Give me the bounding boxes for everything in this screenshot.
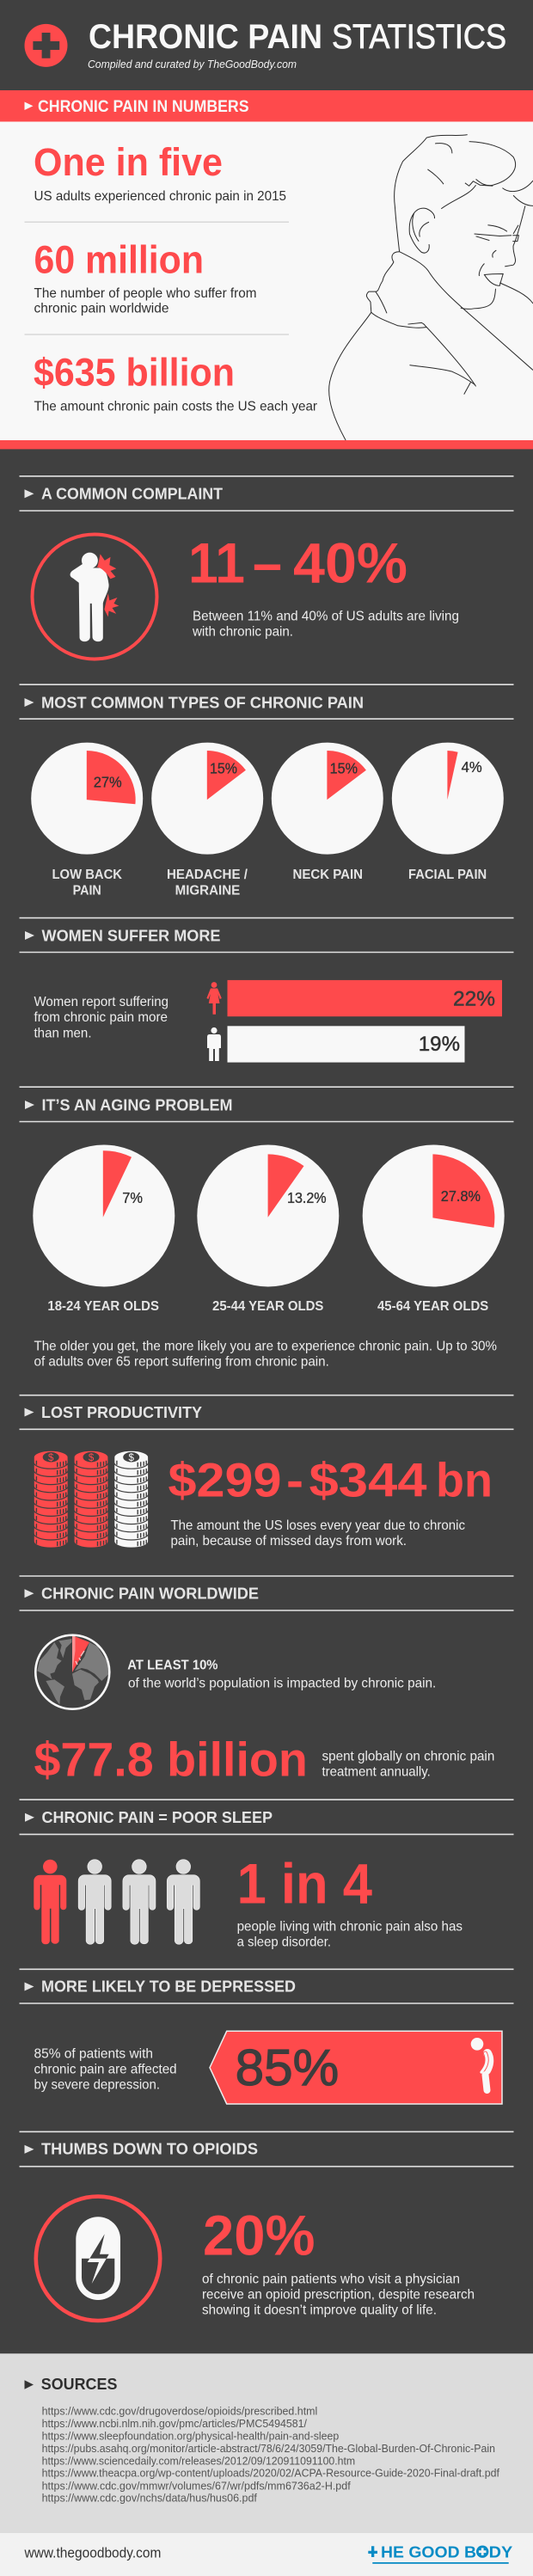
heading: [19, 2131, 514, 2167]
panel: sources: [0, 2353, 533, 2533]
heading: MOST COMMON TYPES OF CHRONIC PAIN: [41, 694, 364, 711]
pie: headache / migraine: MIGRAINE: [175, 883, 241, 898]
source list: https://www.ncbi.nlm.nih.gov/pmc/articles/PMC5494581/: [42, 2417, 307, 2430]
red stack one: $: [48, 1453, 54, 1463]
heading: LOST PRODUCTIVITY: [41, 1404, 202, 1421]
title: STATISTICS: [332, 18, 506, 56]
pie: low back pain: LOW BACK: [52, 868, 122, 882]
heading: [19, 684, 514, 719]
stat: one in five: US adults experienced chronic pain in 2015: [34, 189, 286, 204]
big stat: 1 in 4: [237, 1851, 372, 1915]
body text: [34, 1339, 497, 1370]
footer: [0, 2533, 533, 2576]
heading: [19, 1395, 514, 1429]
source list: https://www.sciencedaily.com/releases/2012/09/120911091100.htm: [42, 2454, 355, 2467]
logo: the good body: HE GOOD B: [381, 2542, 476, 2561]
source list: https://www.cdc.gov/mmwr/volumes/67/wr/pdfs/mm6736a2-H.pdf: [42, 2479, 351, 2492]
pie: 25-44: 25-44 YEAR OLDS: [212, 1299, 324, 1314]
panel: most common types of chronic pain: [19, 684, 514, 898]
icon: medical cross: [24, 24, 67, 67]
panel: poor sleep: [19, 1800, 514, 1949]
heading: WOMEN SUFFER MORE: [41, 927, 220, 944]
body text: [34, 995, 168, 1040]
panel: a common complaint: [19, 476, 514, 659]
panel: more likely to be depressed: [19, 1969, 514, 2104]
stat: one in five: One in five: [34, 140, 223, 184]
source list: https://www.cdc.gov/drugoverdose/opioids/prescribed.html: [42, 2405, 317, 2418]
icon: pill in circle: [36, 2197, 160, 2321]
heading: [19, 1087, 514, 1121]
stat: 60 million: 60 million: [34, 237, 204, 282]
pie: 18-24: 7%: [122, 1189, 143, 1206]
icon: man: [207, 1027, 221, 1061]
body text: showing it doesn’t improve quality of life.: [202, 2303, 437, 2318]
source list: [42, 2405, 499, 2505]
heading: IT’S AN AGING PROBLEM: [41, 1096, 232, 1113]
pie: headache / migraine: [151, 743, 263, 898]
big stat: $299: [168, 1453, 282, 1506]
pie: facial pain: 4%: [462, 758, 482, 776]
heading: THUMBS DOWN TO OPIOIDS: [41, 2141, 258, 2158]
icon: four people: [34, 1860, 199, 1944]
panel: chronic pain worldwide: [19, 1576, 514, 1787]
icon: slumped figure: [471, 2038, 489, 2090]
stat: 60 million: chronic pain worldwide: [34, 301, 169, 316]
stat: 60 million: [34, 237, 256, 316]
body text: [170, 1518, 465, 1549]
panel: lost productivity: [19, 1395, 514, 1549]
bar: men 19%: [227, 1026, 464, 1063]
body text: The older you get, the more likely you are to experience chronic pain. Up to 30%: [34, 1339, 497, 1353]
bar: women 22%: 22%: [453, 987, 495, 1011]
stat: 635 billion: $635 billion: [34, 351, 235, 395]
pie: low back pain: PAIN: [73, 883, 101, 898]
body text: of adults over 65 report suffering from chronic pain.: [34, 1355, 329, 1370]
panel: aging problem: [19, 1087, 514, 1370]
big stat: $77.8 billion: [34, 1733, 308, 1787]
big stat: [168, 1453, 493, 1506]
big stat: 11: [188, 531, 245, 595]
pie: 25-44: [197, 1145, 339, 1314]
panel: women suffer more: [19, 918, 514, 1063]
text: at least 10%: of the world’s population is impacted by chronic pain.: [128, 1676, 436, 1690]
logo: the good body: DY: [489, 2542, 513, 2561]
body text: spent globally on chronic pain: [322, 1750, 494, 1764]
text: at least 10%: AT LEAST 10%: [127, 1659, 218, 1673]
pie: 45-64: 27.8%: [441, 1187, 481, 1205]
stat: 60 million: The number of people who suffer from: [34, 286, 256, 301]
source list: https://www.theacpa.org/wp-content/uploads/2020/02/ACPA-Resource-Guide-2020-Final-draft.pdf: [42, 2467, 499, 2480]
big stat: $344: [309, 1453, 426, 1506]
body text: people living with chronic pain also has: [237, 1919, 463, 1934]
big stat: 20%: [203, 2204, 315, 2267]
red stack two: $: [89, 1453, 95, 1463]
pie: facial pain: [392, 743, 504, 882]
body text: pain, because of missed days from work.: [170, 1534, 407, 1549]
body text: chronic pain are affected: [34, 2062, 177, 2076]
title: CHRONIC PAIN: [89, 18, 322, 56]
heading: [19, 1576, 514, 1610]
source list: https://www.sleepfoundation.org/physical-health/pain-and-sleep: [42, 2430, 339, 2443]
pie: 18-24: 18-24 YEAR OLDS: [47, 1299, 159, 1314]
logo: the good body: [368, 2542, 513, 2564]
icon: globe: [35, 1635, 109, 1709]
bar: women 22%: [227, 980, 502, 1016]
panel: chronic pain in numbers: [0, 90, 533, 449]
pie: headache / migraine: HEADACHE /: [167, 868, 248, 882]
pie: 25-44: 13.2%: [287, 1189, 327, 1206]
heading: CHRONIC PAIN WORLDWIDE: [41, 1585, 259, 1603]
body text: The amount the US loses every year due to chronic: [170, 1518, 465, 1533]
pie: neck pain: 15%: [330, 760, 358, 777]
body text: [237, 1919, 463, 1949]
stat: 635 billion: [34, 351, 318, 414]
big stat: 40%: [293, 531, 407, 595]
body text: than men.: [34, 1026, 91, 1040]
body text: 85% of patients with: [34, 2046, 153, 2061]
body text: Between 11% and 40% of US adults are living: [193, 609, 459, 624]
text: at least 10%: [127, 1659, 436, 1690]
heading: A COMMON COMPLAINT: [41, 486, 223, 503]
body text: [34, 2046, 177, 2092]
pie: neck pain: NECK PAIN: [292, 868, 363, 882]
header: [24, 18, 506, 71]
bar: men 19%: 19%: [419, 1033, 460, 1056]
panel: thumbs down to opioids: [19, 2131, 514, 2321]
body text: a sleep disorder.: [237, 1935, 331, 1949]
icon: person with pain points: [33, 535, 156, 659]
body text: [322, 1750, 494, 1780]
heading: CHRONIC PAIN = POOR SLEEP: [41, 1809, 273, 1826]
pie: neck pain: [272, 743, 383, 882]
title: [89, 18, 506, 56]
heading: SOURCES: [41, 2376, 117, 2393]
stat: 635 billion: The amount chronic pain costs the US each year: [34, 400, 318, 414]
banner: 85%: [210, 2031, 502, 2104]
white stack: $: [128, 1453, 134, 1463]
body text: [202, 2272, 475, 2318]
body text: receive an opioid prescription, despite research: [202, 2288, 475, 2303]
heading: [19, 1800, 514, 1834]
body text: treatment annually.: [322, 1765, 431, 1780]
body text: [192, 609, 459, 640]
big stat: –: [253, 531, 282, 595]
body text: from chronic pain more: [34, 1010, 168, 1025]
heading band: CHRONIC PAIN IN NUMBERS: [38, 97, 249, 116]
icon: coin stacks: [34, 1451, 149, 1548]
pie: facial pain: FACIAL PAIN: [408, 868, 487, 882]
heading: [19, 1969, 514, 2003]
body text: with chronic pain.: [192, 625, 293, 640]
pie: 45-64: [363, 1145, 505, 1314]
pie: 45-64: 45-64 YEAR OLDS: [377, 1299, 489, 1314]
stat: one in five: [34, 140, 286, 204]
source list: https://pubs.asahq.org/monitor/article-abstract/78/6/24/3059/The-Global-Burden-Of-Chronic-Pain: [42, 2442, 495, 2455]
banner: 85%: 85%: [236, 2039, 339, 2096]
icon: woman: [206, 982, 222, 1015]
pie: low back pain: 27%: [94, 773, 122, 790]
website url: www.thegoodbody.com: [24, 2545, 161, 2561]
pie: 18-24: [33, 1145, 175, 1314]
body text: of chronic pain patients who visit a physician: [202, 2272, 460, 2287]
body text: by severe depression.: [34, 2077, 160, 2092]
heading band: [0, 90, 533, 122]
pie: headache / migraine: 15%: [210, 760, 237, 777]
pie: low back pain: [31, 743, 143, 898]
source list: https://www.cdc.gov/nchs/data/hus/hus06.pdf: [42, 2492, 257, 2505]
illustration: man holding neck: [329, 135, 533, 440]
body text: Women report suffering: [34, 995, 168, 1009]
big stat: bn: [436, 1453, 493, 1506]
heading: [19, 476, 514, 511]
heading: [19, 918, 514, 953]
heading: MORE LIKELY TO BE DEPRESSED: [41, 1978, 296, 1996]
subtitle: Compiled and curated by TheGoodBody.com: [88, 58, 297, 71]
big stat: -: [286, 1453, 303, 1506]
big stat: [188, 531, 407, 595]
